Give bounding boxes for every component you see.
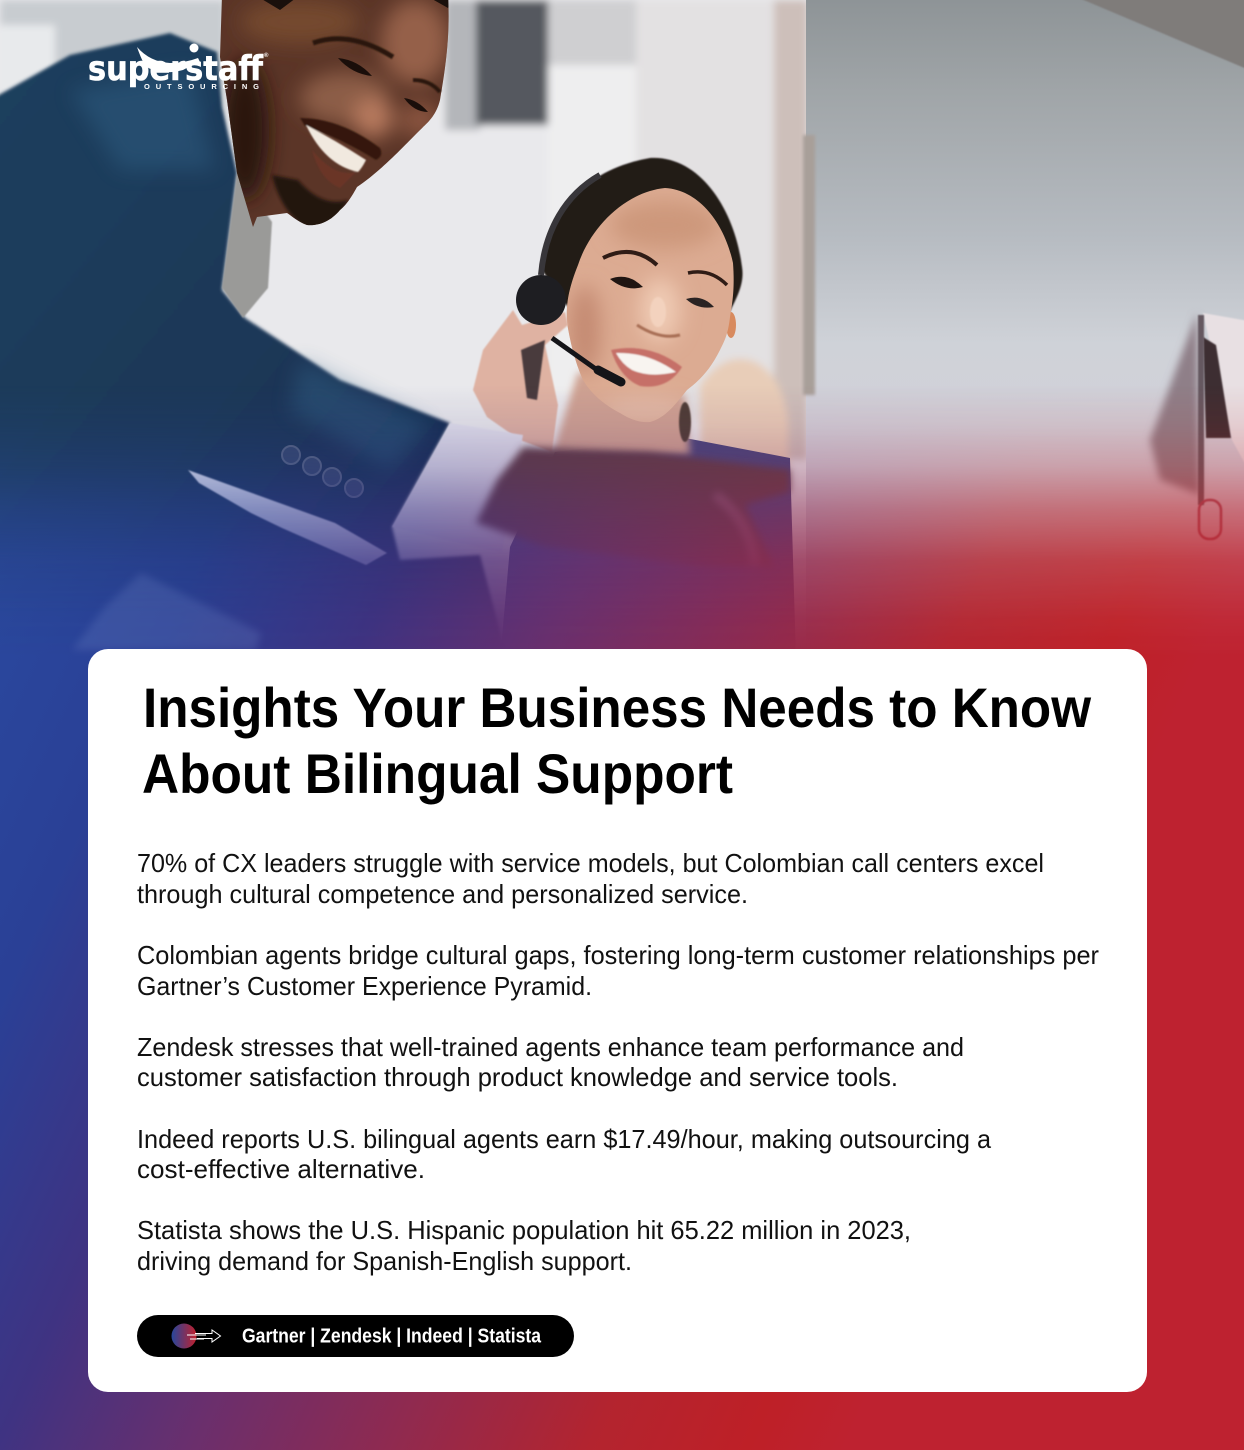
man in navy suit <box>0 0 790 670</box>
text block: Statista <box>137 1215 911 1276</box>
man: pointing hand <box>476 447 790 567</box>
wall behind monitor <box>803 0 1244 670</box>
text block: Statista: driving demand for Spanish-English support. <box>137 1246 632 1276</box>
title: About Bilingual Support <box>142 742 733 805</box>
icon: gradient circle with arrow <box>172 1324 220 1348</box>
title: Insights Your Business Needs to Know <box>143 676 1091 739</box>
man: light gap under sleeve <box>188 470 387 565</box>
man: jacket buttons <box>282 446 363 497</box>
text block: Zendesk: Zendesk stresses that well-trained agents enhance team performance and <box>137 1032 964 1062</box>
man: suit jacket <box>0 33 510 670</box>
monitor <box>1150 313 1244 539</box>
woman: ear <box>726 312 736 338</box>
text block: Colombian agents <box>137 940 1099 1001</box>
logo: superstaff outsourcing <box>88 44 269 91</box>
man: head <box>215 0 455 230</box>
logo tagline: OUTSOURCING <box>144 82 259 91</box>
woman: headset <box>516 175 621 382</box>
lighter wedge at lower left of photo <box>72 573 261 650</box>
woman: face <box>566 188 734 422</box>
text block: Colombian agents: Gartner’s Customer Experience Pyramid. <box>137 971 592 1001</box>
logo wordmark: superstaff <box>88 49 263 89</box>
man: jacket highlights <box>70 70 430 470</box>
sources pill <box>137 1315 574 1357</box>
logo registered mark: ® <box>264 52 269 59</box>
woman: hair <box>540 158 743 442</box>
text block: Indeed: Indeed reports U.S. bilingual agents earn $17.49/hour, making outsourcing a <box>137 1124 992 1154</box>
woman: blazer <box>500 437 796 660</box>
man: shirt cuff <box>392 423 523 553</box>
logo dot <box>190 44 198 52</box>
text block: Indeed <box>137 1124 992 1184</box>
hero photo: agents at a monitor <box>0 0 1244 670</box>
title <box>142 676 1091 805</box>
woman: eyebrows and eyes <box>603 252 727 308</box>
text block: Indeed: cost-effective alternative. <box>137 1154 425 1184</box>
sources text: Gartner | Zendesk | Indeed | Statista <box>242 1326 542 1348</box>
man: beard <box>272 175 348 230</box>
office background <box>0 0 1244 670</box>
woman: hand <box>473 310 568 452</box>
text block: Zendesk <box>137 1032 964 1092</box>
man: hair <box>255 0 455 10</box>
man: ear <box>222 0 256 61</box>
man: smile <box>300 118 381 188</box>
text block: CX leaders: 70% of CX leaders struggle with service models, but Colombian call centers excel <box>137 848 1044 878</box>
content card <box>88 649 1147 1392</box>
text block: CX leaders: through cultural competence and personalized service. <box>137 879 748 909</box>
logo swoosh <box>137 47 200 72</box>
woman: smile <box>611 348 682 387</box>
woman: neck <box>552 372 690 455</box>
man: shirt <box>222 173 272 318</box>
woman: nose <box>637 297 680 336</box>
background gradient fading over photo <box>0 402 1244 1450</box>
text block: Statista: Statista shows the U.S. Hispanic population hit 65.22 million in 2023, <box>137 1215 911 1245</box>
text block: Colombian agents: Colombian agents bridge cultural gaps, fostering long-term customer relationships per <box>137 940 1099 970</box>
woman with headset <box>473 158 796 660</box>
text block: Zendesk: customer satisfaction through product knowledge and service tools. <box>137 1062 898 1092</box>
text block: CX leaders <box>137 848 1044 909</box>
man: eyebrows and eyes <box>313 39 440 112</box>
